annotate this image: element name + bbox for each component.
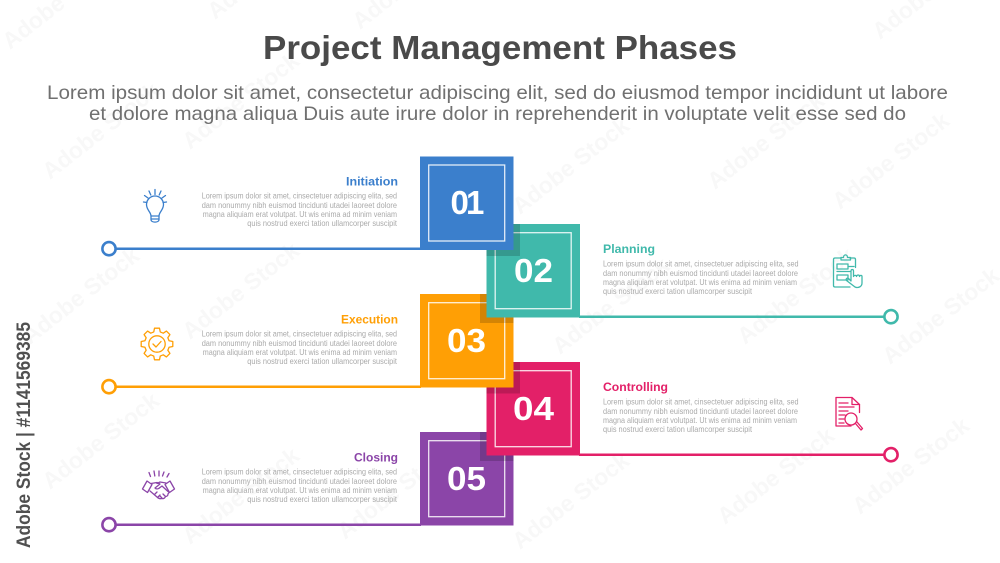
watermark pattern: Adobe Stock <box>17 242 144 349</box>
text execution: magna aliquiam erat volutpat. Ut wis enima ad minim veniam <box>203 347 397 357</box>
watermark pattern: Adobe Stock <box>507 112 634 219</box>
heading closing: Closing <box>354 450 398 464</box>
connector line 03 <box>115 385 421 388</box>
square 04 <box>486 362 580 456</box>
watermark pattern: Adobe Stock <box>177 442 304 549</box>
number 01: 01 <box>450 184 484 221</box>
watermark pattern: Adobe Stock <box>702 87 829 194</box>
text closing: Lorem ipsum dolor sit amet, cinsectetuer adipiscing elita, sed <box>202 466 397 476</box>
icon: document search <box>836 398 862 430</box>
inner frame 03 <box>429 303 505 379</box>
text planning: dam nonummy nibh euismod tincidunti utadei laoreet dolore <box>603 268 798 278</box>
square 03 <box>420 294 514 388</box>
connector line 02 <box>579 315 885 318</box>
connector line 05 <box>115 523 421 526</box>
heading initiation: Initiation <box>346 174 398 188</box>
marker 03 <box>102 380 116 393</box>
text controlling: Lorem ipsum dolor sit amet, cinsectetuer adipiscing elita, sed <box>603 396 799 406</box>
panel: step 05 closing <box>102 432 514 531</box>
subtitle <box>47 82 948 125</box>
text closing: quis nostrud exerci tation ullamcorper suscipit <box>247 494 398 504</box>
inner frame 05 <box>429 441 505 517</box>
heading planning: Planning <box>603 242 655 256</box>
watermark pattern: Adobe Stock <box>732 242 859 349</box>
watermark pattern: Adobe Stock <box>847 412 974 519</box>
marker 02 <box>884 310 898 323</box>
watermark pattern: Adobe Stock <box>37 77 164 184</box>
text initiation <box>202 190 398 228</box>
heading controlling: Controlling <box>603 380 668 394</box>
text closing: dam nonummy nibh euismod tincidunti utadei laoreet dolore <box>202 476 397 486</box>
panel: step 01 initiation <box>102 156 520 256</box>
watermark pattern: Adobe Stock <box>332 437 459 544</box>
text planning: Lorem ipsum dolor sit amet, cinsectetuer adipiscing elita, sed <box>603 258 799 268</box>
watermark pattern: Adobe Stock <box>827 107 954 214</box>
icon: handshake <box>142 471 174 499</box>
shadow on square 02 <box>486 224 520 256</box>
shadow on square 03 <box>480 294 514 323</box>
title: Project Management Phases <box>263 29 737 66</box>
icon: clipboard with hand <box>834 255 862 288</box>
text execution: quis nostrud exerci tation ullamcorper suscipit <box>247 356 398 366</box>
connector line 04 <box>579 453 885 456</box>
stock id label: Adobe Stock | #1141569385 <box>13 322 35 548</box>
text initiation: dam nonummy nibh euismod tincidunti utadei laoreet dolore <box>202 200 397 210</box>
text execution: Lorem ipsum dolor sit amet, cinsectetuer adipiscing elita, sed <box>202 328 397 338</box>
connector line 01 <box>115 247 421 250</box>
watermark pattern: Adobe Stock <box>37 387 164 494</box>
watermark pattern: Adobe Stock <box>507 447 634 554</box>
inner frame 02 <box>495 233 571 309</box>
square 01 <box>420 156 514 250</box>
text controlling: dam nonummy nibh euismod tincidunti utadei laoreet dolore <box>603 406 798 416</box>
text planning: quis nostrud exerci tation ullamcorper suscipit <box>603 286 753 296</box>
watermark pattern: Adobe Stock <box>177 47 304 154</box>
text controlling: quis nostrud exerci tation ullamcorper suscipit <box>603 424 753 434</box>
text planning: magna aliquiam erat volutpat. Ut wis enima ad minim veniam <box>603 277 797 287</box>
number 04: 04 <box>513 390 555 427</box>
watermark pattern: Adobe Stock <box>547 252 674 359</box>
inner frame 04 <box>495 371 571 447</box>
square 02 <box>486 224 580 318</box>
shadow on square 05 <box>480 432 514 461</box>
text closing <box>202 466 398 504</box>
text controlling: magna aliquiam erat volutpat. Ut wis enima ad minim veniam <box>603 415 797 425</box>
icon: gear with check <box>141 328 173 360</box>
number 03: 03 <box>447 322 486 359</box>
shadow on square 04 <box>486 362 520 394</box>
icon: light bulb <box>144 190 166 222</box>
watermark pattern: Adobe Stock <box>712 422 839 529</box>
heading execution: Execution <box>341 312 398 326</box>
panel: step 04 controlling <box>480 362 898 461</box>
subtitle: Lorem ipsum dolor sit amet, consectetur adipiscing elit, sed do eiusmod tempor incididunt ut labore <box>47 82 948 104</box>
number 02: 02 <box>514 252 553 289</box>
text initiation: magna aliquiam erat volutpat. Ut wis enima ad minim veniam <box>203 209 397 219</box>
text initiation: quis nostrud exerci tation ullamcorper suscipit <box>247 218 398 228</box>
subtitle: et dolore magna aliqua Duis aute irure dolor in reprehenderit in voluptate velit esse sed do <box>89 103 906 125</box>
number 05: 05 <box>447 460 486 497</box>
inner frame 01 <box>429 165 505 241</box>
watermark pattern: Adobe Stock <box>177 237 304 344</box>
marker 04 <box>884 448 898 461</box>
text controlling <box>603 396 799 434</box>
text execution: dam nonummy nibh euismod tincidunti utadei laoreet dolore <box>202 338 397 348</box>
marker 05 <box>102 518 116 531</box>
text closing: magna aliquiam erat volutpat. Ut wis enima ad minim veniam <box>203 485 397 495</box>
square 05 <box>420 432 514 526</box>
panel: step 03 execution <box>102 294 520 394</box>
text planning <box>603 258 799 296</box>
marker 01 <box>102 242 116 255</box>
panel: step 02 planning <box>480 224 898 323</box>
text initiation: Lorem ipsum dolor sit amet, cinsectetuer adipiscing elita, sed <box>202 190 397 200</box>
text execution <box>202 328 398 366</box>
